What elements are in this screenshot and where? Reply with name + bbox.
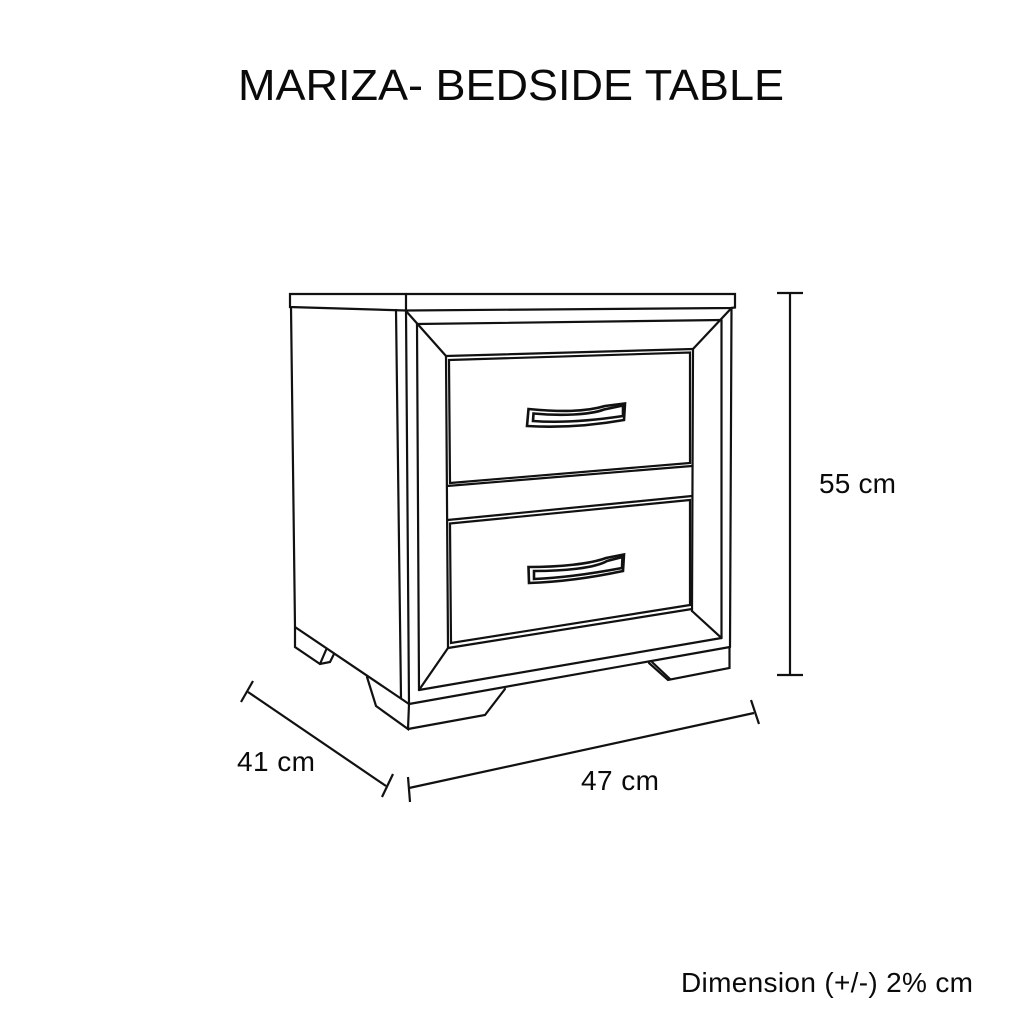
table top (290, 294, 735, 310)
height label: 55 cm (819, 468, 896, 499)
lower drawer (448, 496, 692, 648)
front frame (406, 308, 732, 704)
bedside table drawing (290, 294, 735, 729)
tolerance note: Dimension (+/-) 2% cm (681, 967, 973, 998)
upper drawer handle (527, 404, 625, 427)
lower drawer handle (528, 554, 624, 583)
upper drawer (446, 349, 693, 486)
width label: 47 cm (581, 765, 659, 796)
side panel (291, 307, 419, 704)
depth label: 41 cm (237, 746, 315, 777)
title: MARIZA- BEDSIDE TABLE (238, 61, 784, 110)
width dimension line (408, 700, 759, 802)
table feet (295, 627, 730, 729)
height dimension line (777, 293, 803, 675)
depth dimension line (241, 681, 393, 797)
